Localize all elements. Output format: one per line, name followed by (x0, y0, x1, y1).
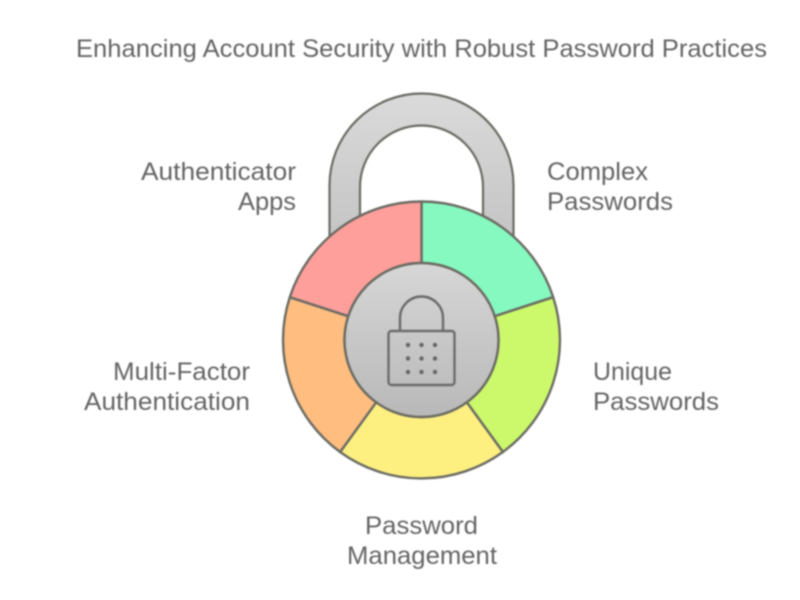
label: password management (347, 512, 497, 570)
label: authenticator apps: Apps (238, 188, 296, 216)
label: authenticator apps (141, 158, 296, 216)
label: multi-factor authentication: Multi-Factor (113, 358, 250, 386)
label: unique passwords: Unique (593, 358, 672, 386)
padlock wheel (283, 202, 560, 478)
label: authenticator apps: Authenticator (141, 158, 296, 186)
label: password management: Password (365, 512, 478, 540)
label: multi-factor authentication: Authentication (84, 388, 250, 416)
segment: unique passwords (467, 297, 560, 452)
title: Enhancing Account Security with Robust Password Practices (76, 35, 767, 63)
segment: authenticator apps (290, 202, 422, 316)
label: complex passwords: Passwords (547, 188, 673, 216)
segment: password management (340, 402, 503, 478)
label: complex passwords: Complex (547, 158, 649, 186)
icon: small padlock (388, 296, 454, 385)
segment: multi-factor authentication (283, 297, 376, 452)
label: complex passwords (547, 158, 673, 216)
icon: padlock shackle (330, 94, 514, 240)
segment: complex passwords (422, 202, 553, 316)
label: multi-factor authentication (84, 358, 250, 416)
label: password management: Management (347, 542, 497, 570)
label: unique passwords (593, 358, 719, 416)
label: unique passwords: Passwords (593, 388, 719, 416)
center circle (344, 263, 498, 417)
